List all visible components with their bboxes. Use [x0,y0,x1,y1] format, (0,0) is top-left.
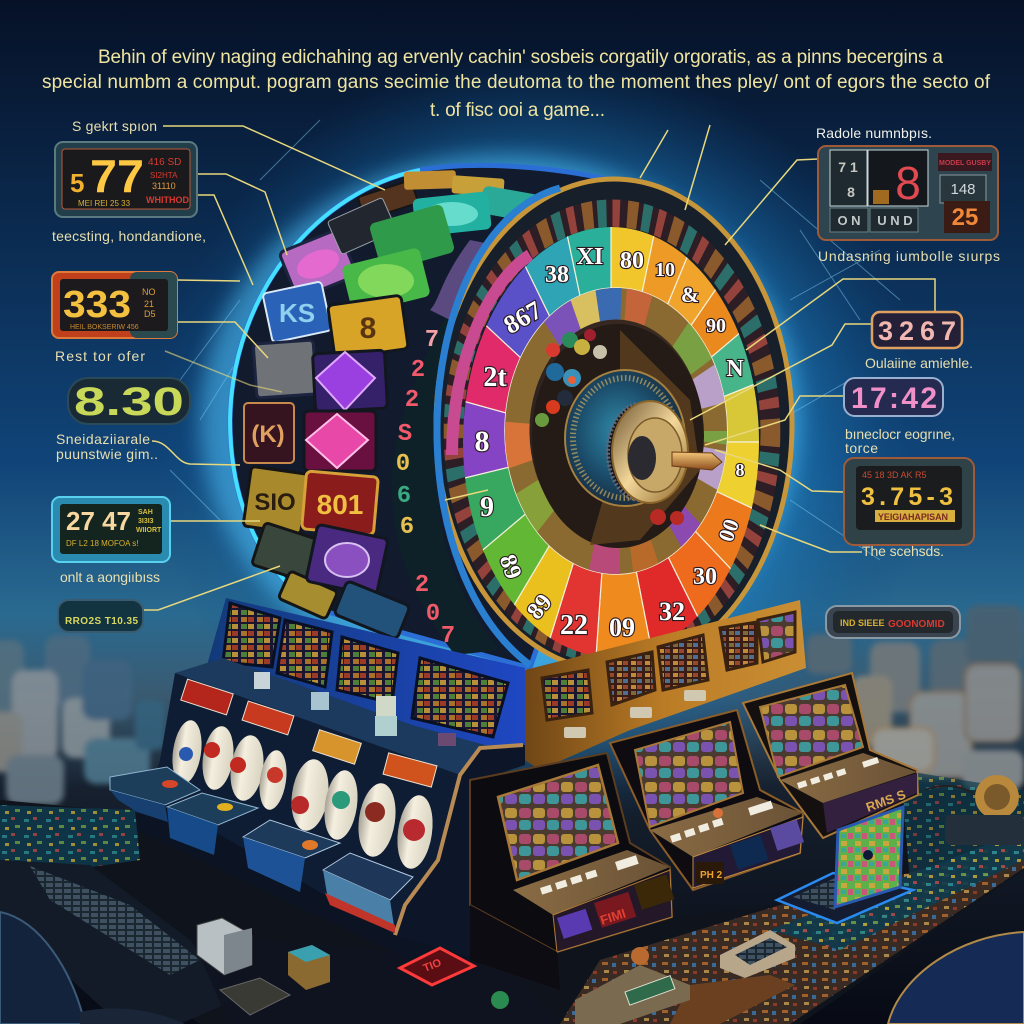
numbered colour segments ring [463,227,759,654]
segment numbers: 9 [480,492,494,523]
segment numbers: 867 [499,295,547,340]
callout: 27 47 display: onlt a aongiıbıss [60,569,160,585]
callout: 17:42 pill [844,378,955,456]
callout: 3.75-3 display: YEIGIAHAPISAN [878,512,948,522]
sign plates [181,679,437,787]
callout: 27 47 display: 3I3I3 [138,518,154,525]
table props [197,918,795,1024]
segment numbers: 89 [494,551,526,583]
callout: scoreboard: Undasning iumbolle sıurps [818,248,1000,264]
callout: 27 47 display: SAH [138,509,153,516]
callout: time strip pill: RRO2S T10.35 [65,616,138,627]
orange chips [670,975,795,1024]
gold machine: left: FIMI [598,906,628,928]
segment numbers: 38 [545,262,569,288]
segment numbers: 89 [522,589,558,625]
gold machine bank: upper tier [525,600,806,770]
callout: S77 display [52,118,206,244]
reels [169,718,437,871]
foreground chair: bottom left [80,1008,185,1024]
top screens [223,603,508,737]
callout: 333 display: NO [142,287,156,297]
callout: 17:42 pill: torce [845,440,878,456]
title text block: special numbm a comput. pogram gans secimie the deutoma to the moment thes pley/ ont of egors the secto of [42,72,991,93]
callout: scoreboard: U N D [877,213,913,228]
callout: 17:42 pill: bıneclocr eogrıne, [845,426,955,442]
segment numbers: 90 [706,315,726,337]
gold machine: center: PH 2 [700,870,723,881]
background chairs: right [806,605,1024,790]
segment numbers: 80 [620,248,644,274]
central hub ring [565,370,685,506]
gold machine: right: RMS S [864,787,908,815]
beige keyboard [720,930,795,978]
outer gold and blue rim [436,179,792,671]
brass cap [612,401,688,503]
callout: 3.75-3 display [844,458,974,559]
drum tile column: middle: 8 [360,312,376,345]
drum tile column: numbers: 0 [396,451,410,478]
colour cube [288,945,330,990]
segment numbers: & [681,282,699,307]
drum tile column: numbers: 6 [400,514,414,541]
drum tile column: numbers: 2 [405,387,419,414]
callout: S77 display: 416 SD [148,157,181,168]
red neon tag [400,948,474,985]
callout: 3.75-3 display: 45 18 3D AK R5 [862,470,927,480]
drum tile column: numbers: 2 [411,357,425,384]
wheel glow [200,155,800,685]
callout: scoreboard: 7 1 [838,159,858,175]
callout: S77 display: S gekrt spıon [72,118,157,134]
white box [197,918,252,975]
scanner [575,965,690,1024]
callout: 333 display: 333 [63,284,131,326]
laptop [777,807,913,923]
pink band accent [452,255,530,455]
reel symbols [179,742,425,841]
drum tile column: outer: SIO [254,489,296,516]
callout: scoreboard: 148 [950,181,976,198]
callout: 333 display [52,272,177,364]
title text block [42,47,991,121]
segment numbers: 10 [655,259,675,281]
inner dark core [532,324,704,548]
callout: 3267 pill: 3267 [878,316,956,346]
callout: S77 display: SI2HTA [150,171,178,180]
hub dark ratchet [608,404,672,500]
callout: game strip pill: IND SIEEE [840,618,885,628]
callout: 27 47 display: DF L2 18 MOFOA s! [66,539,138,548]
callout: S77 display: 31110 [152,181,176,191]
callout: 333 display: D5 [144,309,156,319]
drum tile column: numbers: 2 [415,572,429,599]
decorative band of tiny tiles [454,213,770,651]
callout: scoreboard: 8 [847,184,855,200]
drum tile column: numbers: S [398,421,412,448]
callout: scoreboard: 25 [952,204,978,231]
clutter on table: right [560,830,1024,1024]
upper screens [542,612,795,720]
callout: S77 display: MEI REI 25 33 [78,199,131,208]
callout: scoreboard: Radole numnbpıs. [816,125,932,141]
coin stacks [254,672,456,746]
bingo balls [535,329,684,525]
front panel [150,673,460,935]
segment numbers: 8 [474,425,490,458]
trays [110,767,413,933]
background chairs: left [0,635,165,805]
callout: 333 display: Rest tor ofer [55,348,145,364]
callout: 3267 pill: Oulaiine amiehle. [865,355,973,371]
tag text: TIO [422,957,444,975]
drum tile column: outer: (K) [251,421,285,448]
wheel front face [434,176,794,668]
callout: time strip pill [58,600,143,632]
callout: S77 display: teecsting, hondandione, [52,228,206,244]
callout: 8.30 pill [56,378,190,462]
callout: 17:42 pill: 17:42 [851,382,937,415]
callout: 3267 pill [865,312,973,371]
segment numbers [474,244,744,642]
callout: 27 47 display [52,497,170,585]
callout: 3.75-3 display: 3.75-3 [861,483,953,511]
callout: S77 display: 5 [70,168,84,198]
drum tile column: numbers: 7 [441,623,455,650]
back panel [200,598,525,765]
callout: game strip pill: GOONOMID [888,619,945,630]
callout: 333 display: 21 [144,299,154,309]
segment numbers: 30 [693,564,717,590]
drum tile column: outer: KS [279,298,315,328]
gold machine: right [743,673,918,838]
callout: 8.30 pill: puunstwie gim.. [56,446,158,462]
segment numbers: 32 [659,597,685,626]
inner mechanism [505,288,727,574]
table surface [0,770,1024,1024]
segment numbers: 00 [713,516,744,545]
drum tile column: numbers: 0 [426,601,440,628]
foreground chair: right [888,932,1024,1024]
segment numbers: 22 [560,610,588,641]
callout: game strip pill [826,606,960,638]
segment numbers: 2t [483,362,507,393]
drum of the wheel [230,165,612,668]
segment numbers: 09 [609,613,635,642]
flat device [220,978,290,1015]
foreground chair: left [0,912,85,1024]
callout: 27 47 display: 27 47 [66,506,131,536]
callout: S77 display: 77 [90,150,144,202]
spindle [672,452,722,470]
leader lines [143,125,935,610]
callout: scoreboard: 8 [895,157,921,209]
callout: scoreboard: O N [837,213,861,228]
green ball [491,991,509,1009]
gold machine: center [610,710,804,890]
control strip on table: left [0,860,235,1024]
drum tile column: middle [302,185,551,639]
title text block: Behin of eviny naging edichahing ag ervenly cachin' sosbeis corgatily orgoratis, as a pinns becergins a [98,47,943,68]
tray buttons [162,780,318,850]
segment numbers: N [726,356,744,382]
drum tile column: numbers [392,240,520,655]
upper trays [564,690,706,738]
bronze trim [395,745,523,935]
drum tile column: numbers: 6 [397,483,411,510]
dark gap beside the bank [395,745,525,960]
callout: S77 display: WHITHOD [146,195,189,205]
clutter on table: center [190,935,560,1024]
gold machine: left [470,753,674,990]
blue slot machine bank [110,598,525,960]
title text block: t. of fisc ooi a game... [430,100,605,121]
drum tile column: outer [243,170,505,619]
drum tile column: numbers: 7 [425,327,439,354]
confetti on table: left [0,805,140,870]
drum tile column: middle: 801 [317,489,363,520]
segment numbers: XI [577,244,603,270]
marble [631,947,649,965]
shelf [175,658,508,775]
segment numbers: 8 [736,460,744,480]
dark base [137,780,480,960]
callout: scoreboard: MODEL GUSBY [939,160,991,167]
inner tile ring [517,304,715,558]
callout: 8.30 pill: Sneidaziiarale [56,431,150,447]
callout: scoreboard [816,125,1000,264]
callout: 27 47 display: WIIORT [136,527,162,534]
headphones [925,775,1024,845]
callout: 333 display: HEIL BOKSERIW 456 [70,324,139,331]
callout: 3.75-3 display: The scehsds. [862,543,944,559]
callout: 8.30 pill: 8.30 [74,380,184,424]
